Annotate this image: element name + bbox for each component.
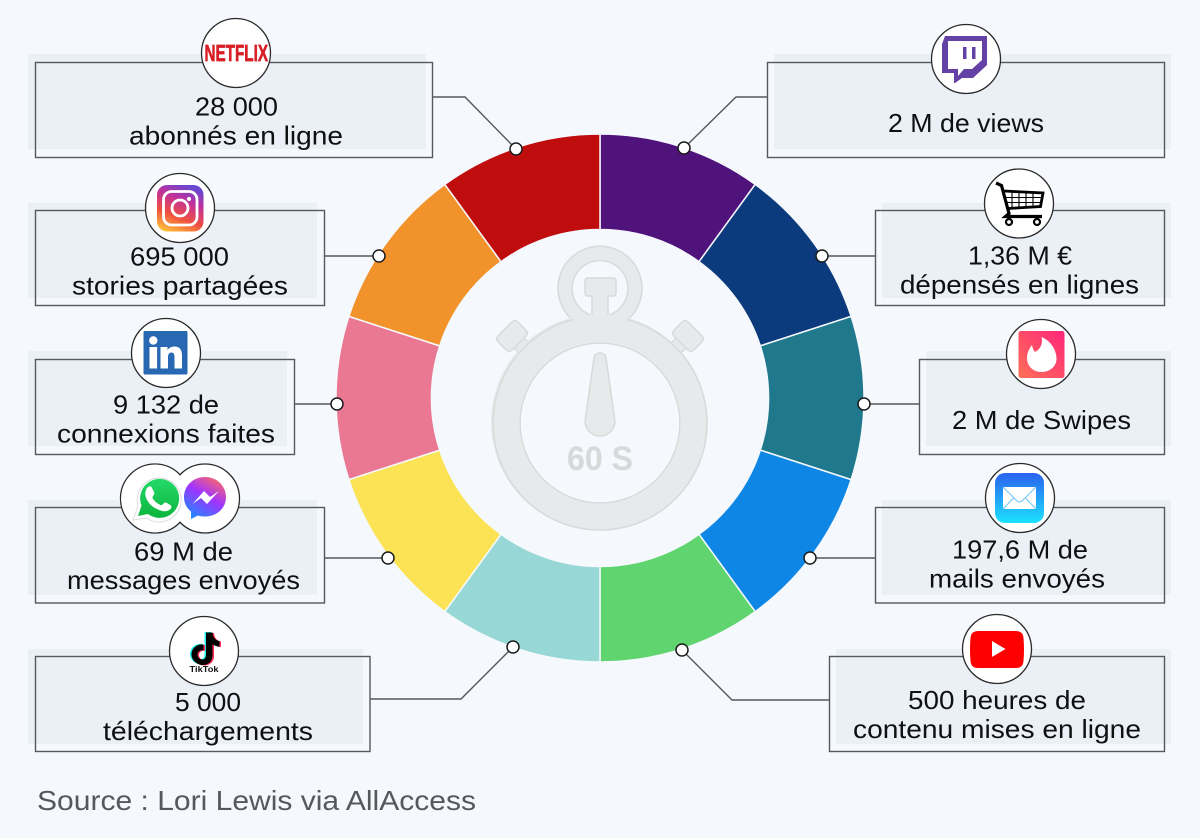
- panel: Netflix: abonnés en ligne: [129, 120, 343, 150]
- panel: Tinder: [858, 320, 1171, 454]
- panel: YouTube: contenu mises en ligne: [853, 714, 1141, 744]
- icon: shopping cart: [984, 169, 1054, 238]
- panel: TikTok: téléchargements: [103, 716, 313, 746]
- stopwatch hand: [585, 353, 615, 436]
- panel: Instagram: [28, 174, 385, 306]
- panel: mail: 197,6 M de: [952, 534, 1088, 564]
- panel: Instagram: 695 000: [130, 242, 229, 272]
- stopwatch left button: [495, 319, 542, 366]
- icon: LinkedIn: [132, 318, 200, 388]
- stopwatch dial ring: [491, 314, 707, 530]
- panel: YouTube: [676, 614, 1171, 752]
- panel: WhatsApp and Messenger: [28, 464, 394, 603]
- stopwatch label: 60 S: [567, 440, 633, 478]
- icon: Twitch: [932, 24, 1000, 94]
- panel: Netflix: 28 000: [195, 92, 278, 122]
- panel: YouTube: 500 heures de: [908, 685, 1086, 715]
- panel: WhatsApp and Messenger: messages envoyés: [67, 565, 300, 595]
- panel: online spending: 1,36 M €: [968, 240, 1073, 270]
- panel: TikTok: 5 000: [175, 687, 241, 717]
- panel: Twitch: 2 M de views: [888, 108, 1044, 138]
- icon: TikTok: [170, 616, 238, 686]
- icon: Netflix: NETFLIX: [204, 40, 268, 66]
- icon: stopwatch: [491, 246, 707, 530]
- icon: Instagram: [146, 174, 214, 242]
- stopwatch crown: [585, 278, 616, 325]
- panel: WhatsApp and Messenger: 69 M de: [134, 536, 233, 566]
- source note: Source : Lori Lewis via AllAccess: [37, 785, 476, 816]
- icon: Tinder: [1006, 320, 1076, 388]
- panel: LinkedIn: [28, 318, 343, 454]
- icon: YouTube: [962, 614, 1032, 684]
- icon: TikTok: TikTok: [190, 664, 219, 674]
- donut chart: ten segments: [336, 134, 864, 662]
- icon: WhatsApp and Messenger: [120, 464, 240, 533]
- panel: online spending: [816, 169, 1171, 306]
- panel: LinkedIn: 9 132 de: [113, 390, 219, 420]
- panel: Tinder: 2 M de Swipes: [952, 405, 1131, 435]
- panel: Netflix: [28, 18, 522, 158]
- panel: Instagram: stories partagées: [72, 270, 288, 300]
- panel: Twitch: [678, 24, 1171, 158]
- icon: Netflix: [202, 18, 270, 88]
- stopwatch right button: [658, 319, 705, 366]
- panel: mail: mails envoyés: [929, 564, 1105, 594]
- panel: TikTok: [28, 616, 519, 752]
- panel: LinkedIn: connexions faites: [57, 418, 275, 448]
- panel: mail: [804, 464, 1171, 603]
- stopwatch top ring: [558, 246, 642, 322]
- panel: online spending: dépensés en lignes: [900, 270, 1139, 300]
- icon: mail: [986, 464, 1054, 532]
